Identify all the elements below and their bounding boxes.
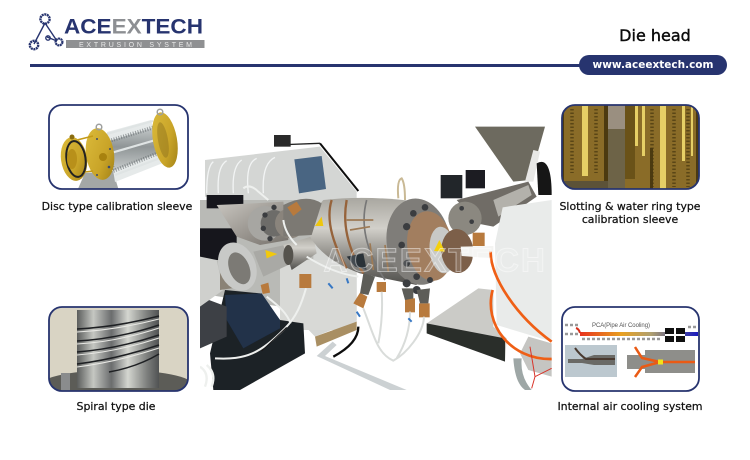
watermark: ACEEXTECH (323, 243, 545, 280)
caption: disc type: Disc type calibration sleeve (42, 200, 192, 213)
caption: internal air cooling: Internal air cooling system (557, 400, 703, 413)
bronze flange (403, 208, 457, 284)
header rule (30, 64, 590, 67)
front die nozzle (427, 225, 457, 275)
left pipe and flange (220, 260, 243, 290)
title: Die head (619, 26, 691, 45)
white machine housing (495, 200, 552, 342)
orange hoses (491, 252, 552, 359)
main photo: extrusion die head machine (200, 126, 552, 390)
panel: internal air cooling system (561, 306, 700, 392)
panel: spiral type die (48, 306, 189, 392)
logo wordmark: ACEEXTECH (64, 16, 203, 38)
website pill (579, 54, 727, 74)
left black stand (200, 228, 237, 260)
white hoses (200, 178, 424, 387)
logo (28, 13, 204, 50)
caption: slotting and water ring: calibration sleeve (582, 212, 678, 226)
dark cable fittings (360, 273, 430, 303)
logo tagline (66, 40, 204, 49)
back extruder (457, 182, 537, 227)
yellow warning left (265, 250, 277, 258)
blue fittings (328, 278, 412, 322)
central barrel (310, 198, 417, 285)
panel: disc type calibration sleeve (48, 104, 189, 190)
small left flange (283, 199, 322, 237)
logo icon: connected gears (30, 14, 62, 49)
base shapes (210, 290, 305, 390)
cabinet louver (294, 156, 326, 193)
grey cabinet (205, 147, 357, 337)
floor pipe (317, 342, 407, 390)
lower cabinet (280, 260, 357, 330)
panel: internal air cooling system: PCA(Pipe Air Cooling) (592, 323, 650, 329)
hopper (475, 127, 545, 182)
lower right (520, 337, 552, 377)
panel: slotting and water ring sleeve (561, 104, 700, 190)
logo tagline: EXTRUSION SYSTEM (79, 42, 192, 49)
website pill: www.aceextech.com (593, 58, 713, 70)
white pipe (461, 246, 493, 258)
caption: slotting and water ring (560, 200, 700, 226)
brown cable sleeves (261, 202, 485, 317)
large dark flange (381, 194, 456, 289)
tray (427, 288, 507, 362)
machine backdrop (200, 200, 313, 307)
caption: slotting and water ring: Slotting & water ring type (560, 200, 700, 213)
caption: spiral type: Spiral type die (77, 400, 155, 413)
